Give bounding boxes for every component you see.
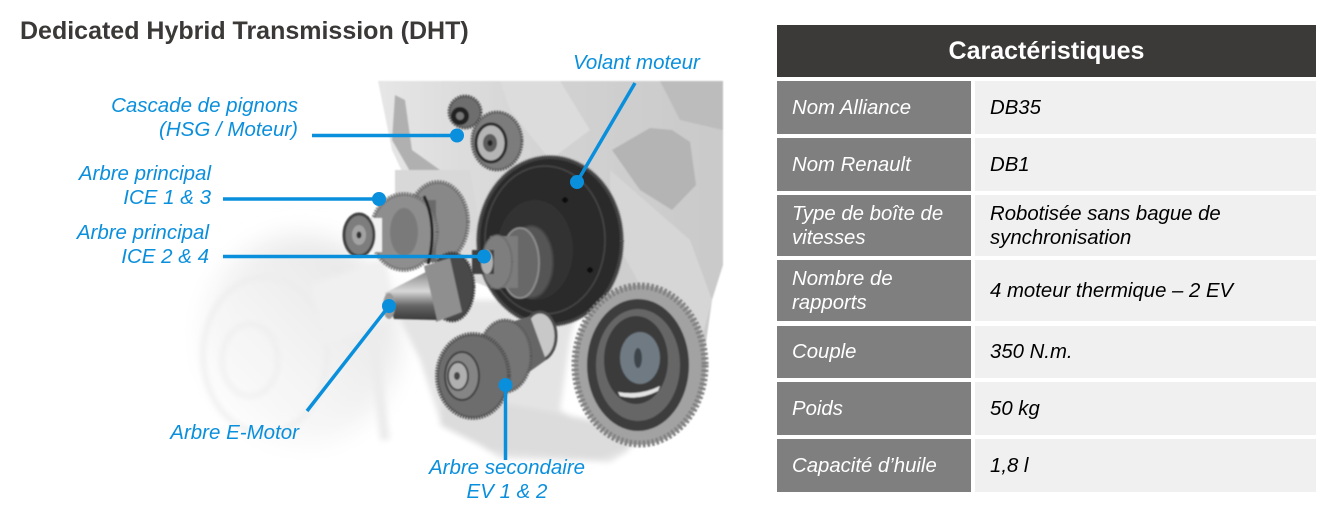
callout: Arbre principal ICE 2 & 4: Arbre principal [75, 221, 210, 244]
faded electric motor [200, 235, 400, 445]
gear cluster: main shaft ICE 2 and 4 [472, 226, 553, 298]
row: Nom Renault: DB1 [990, 154, 1030, 176]
row: Nombre de rapports [777, 260, 1316, 321]
callout: Cascade de pignons: Cascade de pignons [111, 94, 298, 117]
exploded transmission illustration with callouts [75, 51, 724, 503]
row: Couple: Couple [792, 341, 856, 363]
gear cluster: secondary shaft EV 1 and 2 [437, 312, 556, 418]
engine block background [378, 81, 723, 350]
callout: Arbre principal ICE 1 & 3 [77, 162, 386, 209]
callout: Arbre secondaire EV 1 & 2: Arbre secondaire [427, 456, 585, 479]
row: Capacité d'huile [777, 439, 1316, 492]
gear cluster: main shaft ICE 1 and 3 [344, 182, 468, 270]
row: Nom Alliance: DB35 [990, 96, 1041, 118]
title: Dedicated Hybrid Transmission (DHT) [20, 17, 469, 45]
flywheel [477, 156, 623, 326]
row: Nom Renault: Nom Renault [792, 154, 911, 176]
callout: Arbre E-Motor [168, 299, 396, 444]
ground shadow [390, 300, 635, 462]
callout: Cascade de pignons [111, 94, 464, 142]
row: Nombre de rapports: Nombre de rapports [792, 268, 893, 314]
row: Poids: 50 kg [990, 398, 1040, 420]
row: Nom Alliance: Nom Alliance [792, 96, 911, 118]
callout: Arbre secondaire EV 1 & 2 [427, 378, 585, 503]
callout: Cascade de pignons: (HSG / Moteur) [159, 118, 298, 141]
large differential gear [574, 285, 706, 445]
callout: Arbre principal ICE 2 & 4: ICE 2 & 4 [121, 245, 209, 268]
callout: Arbre principal ICE 1 & 3: ICE 1 & 3 [123, 186, 212, 209]
row: Nom Alliance [777, 81, 1316, 134]
callout: Volant moteur [570, 51, 701, 189]
row: Nombre de rapports: 4 moteur thermique – 2 EV [990, 280, 1233, 302]
gear cluster: E-motor shaft [383, 253, 474, 322]
gear: HSG intermediate wheel [472, 112, 522, 170]
row: Couple [777, 326, 1316, 378]
table header [777, 25, 1316, 77]
characteristics table [777, 25, 1316, 492]
callout: Arbre secondaire EV 1 & 2: EV 1 & 2 [467, 480, 548, 503]
row: Type de boîte de vitesses: Robotisée sans bague de synchronisation [990, 202, 1221, 248]
row: Couple: 350 N.m. [990, 341, 1073, 363]
callout: Volant moteur: Volant moteur [573, 51, 701, 74]
motor detail rings [203, 258, 395, 440]
row: Capacité d'huile: 1,8 l [990, 454, 1028, 476]
callout: Arbre principal ICE 2 & 4 [75, 221, 491, 268]
row: Type de boîte de vitesses [777, 195, 1316, 256]
callout: Arbre E-Motor: Arbre E-Motor [168, 421, 300, 444]
row: Poids: Poids [792, 398, 843, 420]
gear: HSG small pinion [449, 96, 481, 128]
row: Poids [777, 382, 1316, 435]
callout: Arbre principal ICE 1 & 3: Arbre principal [77, 162, 212, 185]
table header: Caractéristiques [949, 37, 1144, 65]
row: Capacité d'huile: Capacité d’huile [792, 454, 937, 476]
row: Type de boîte de vitesses: Type de boîte de vitesses [792, 202, 943, 248]
row: Nom Renault [777, 138, 1316, 191]
